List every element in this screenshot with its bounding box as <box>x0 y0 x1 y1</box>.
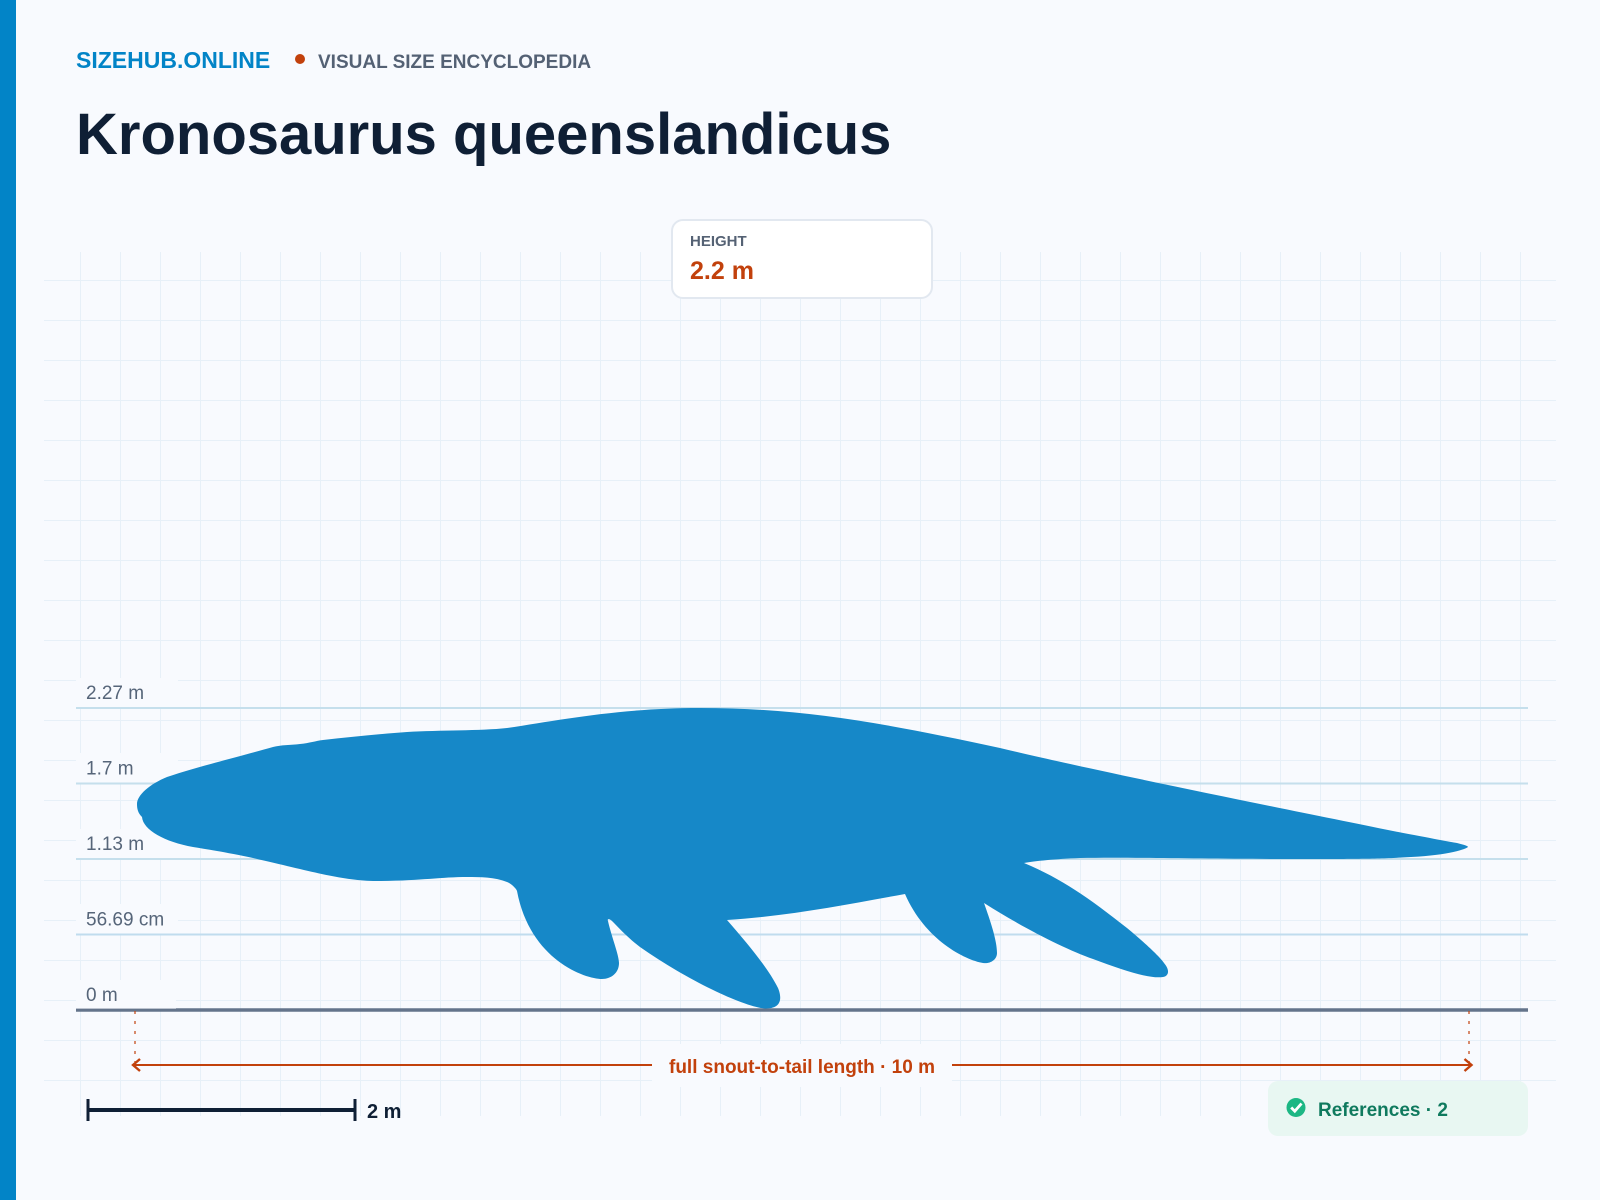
height value: 2.2 m <box>690 257 754 285</box>
tick: 56.69 cm: 56.69 cm <box>86 910 164 930</box>
tick: 1.7 m: 1.7 m <box>86 758 134 780</box>
length dimension <box>133 1011 1472 1087</box>
dimension arrow <box>133 1059 1472 1071</box>
left and right dotted guides <box>135 1011 1469 1062</box>
tick: 2.27 m: 2.27 m <box>86 683 144 704</box>
header: brand line <box>76 47 591 73</box>
scale bar: 2 m <box>367 1101 401 1123</box>
height card <box>671 219 933 299</box>
tick: 2.27 m <box>76 678 1528 708</box>
references text: References · 2 <box>1318 1100 1448 1121</box>
ground line <box>76 1008 1528 1012</box>
references badge <box>1268 1081 1528 1136</box>
tick: 1.7 m <box>76 753 1528 784</box>
dimension label <box>652 1044 952 1087</box>
tick: 0 m: 0 m <box>86 985 118 1006</box>
tick: 0 m <box>76 980 176 1009</box>
separator dot <box>295 54 305 64</box>
brand name: SIZEHUB.ONLINE <box>76 47 270 73</box>
height label: HEIGHT <box>690 233 747 250</box>
silhouette: Kronosaurus <box>137 708 1468 1009</box>
icon: check circle <box>1286 1098 1306 1117</box>
height tick labels <box>76 678 1528 1009</box>
tagline: VISUAL SIZE ENCYCLOPEDIA <box>318 52 591 73</box>
title: Kronosaurus queenslandicus <box>76 102 891 167</box>
tick: 1.13 m <box>76 829 1528 859</box>
tick: 1.13 m: 1.13 m <box>86 834 144 855</box>
tick: 56.69 cm <box>76 904 1528 934</box>
dimension label: full snout-to-tail length · 10 m <box>669 1057 935 1078</box>
accent bar <box>0 0 16 1200</box>
